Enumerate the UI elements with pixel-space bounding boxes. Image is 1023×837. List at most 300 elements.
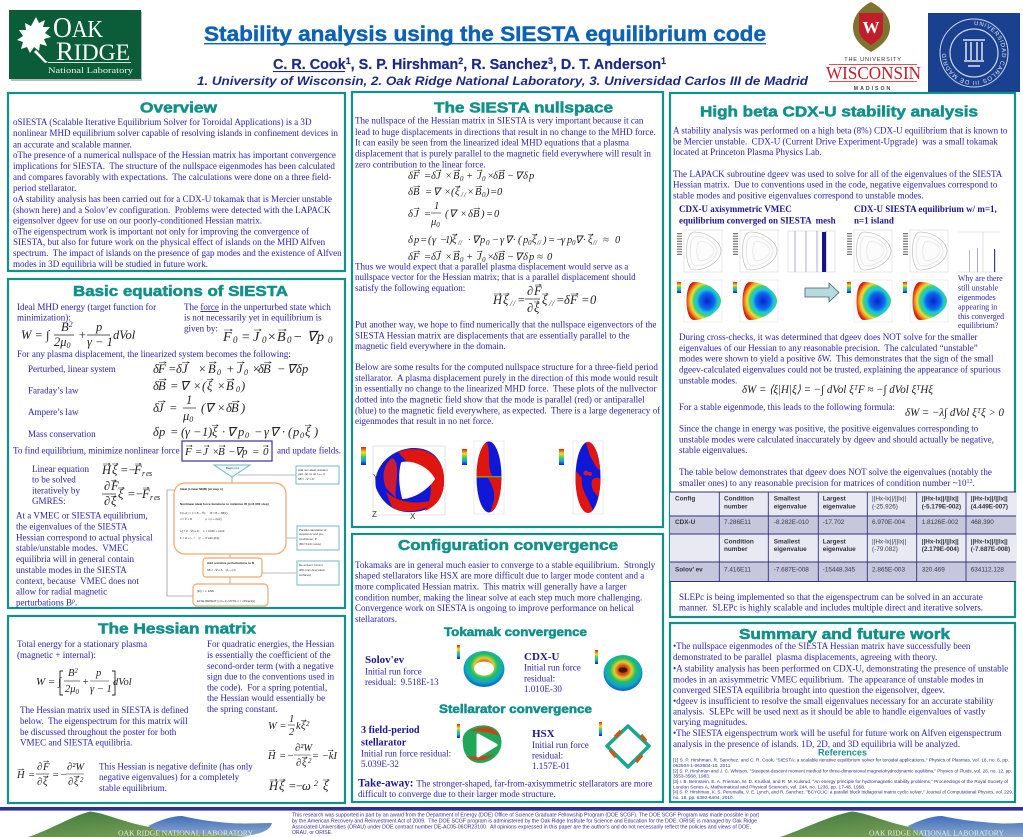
text: overview bullets: period stellarator.: [13, 183, 76, 193]
text: references: 062504-1-062504-10, 2011.: [673, 763, 732, 769]
equation: energy W: [21, 320, 136, 350]
equations: linear system: μ: [183, 409, 189, 423]
logo: University of Wisconsin: W: [862, 18, 880, 37]
equations: linear system: ×δB−∇δp: [252, 362, 308, 376]
table header row 2: ||Hx-lx||/||lx||: [872, 538, 907, 546]
text: positive energy: .: [973, 478, 975, 488]
authors: , S. P. Hirshman: [351, 57, 458, 73]
text: quadratic energies: the code). For a spring potential,: [207, 682, 327, 692]
text: nullspace intro: displacement that is purely parallel to the magnetic field everywhere will result in: [355, 148, 651, 158]
equation: energy W: γ − 1: [87, 335, 113, 349]
equations: spring potential: = −kI: [312, 751, 337, 762]
equations: linear system: ): [240, 379, 245, 393]
text: left subheading: equilibrium converged on SIESTA mesh: [679, 216, 836, 226]
table header row 1: ||Hx-lx||/||lx||: [922, 496, 959, 502]
plots: SIESTA heat maps: [847, 280, 948, 322]
text: references: [673, 758, 1013, 801]
text: summary bullets: demonstrated to be parallel plasma displacements, agreeing with theory.: [673, 652, 937, 662]
text: summary bullets: •A stability analysis has been performed on CDX-U, demonstrating the presence of unstable: [673, 664, 1008, 674]
equation: Hessian solve: Hξ=−F: [102, 463, 142, 477]
text: VMEC equilibrium note: Hessian correspond to actual physical: [16, 532, 153, 542]
equations: spring potential: 2: [289, 727, 295, 738]
panel: overview: [8, 93, 345, 271]
table header row 2: (-7.687E-008): [971, 546, 1010, 553]
text: right subheading: [854, 204, 997, 226]
text: CDX-U intro: located at Princeton Plasma Physics Lab.: [673, 147, 822, 157]
text: configuration intro: Convergence work on SIESTA is ongoing to improve performance on helical: [355, 603, 634, 613]
text: acknowledgement: ORAU, or ORISE.: [292, 830, 332, 836]
icon: HSX stellarator: [599, 722, 649, 767]
text: take-away: [358, 778, 652, 799]
plots: VMEC contours: [680, 230, 778, 272]
text: configuration intro: [355, 560, 656, 624]
equation: energy W: 0: [67, 341, 71, 350]
text: configuration intro: more complicated Hessian matrix. This matrix will generally have a larger: [355, 582, 626, 592]
logo: Oak Ridge National Laboratory: National Laboratory: [48, 65, 134, 75]
text: positive energy: unstable modes were calculated inaccurately by dgeev and should actually be negative,: [679, 434, 994, 444]
text: Solov'ev: [365, 654, 439, 687]
equation: force F0: 0: [328, 335, 333, 345]
text: quadratic energies: sign due to the conventions used in: [207, 672, 335, 682]
equations: nullspace derivation: ·∇p: [468, 235, 485, 246]
equation: total energy: 2: [74, 667, 78, 675]
text: VMEC equilibrium note: the eigenvalues of the SIESTA: [16, 522, 128, 532]
text: equation labels: Ampere’s law: [28, 407, 79, 417]
text: VMEC equilibrium note: .: [75, 598, 77, 608]
plot: cross-section 2: [559, 441, 603, 514]
flowchart: SIESTA algorithm: conditioner: Pʼ: [299, 537, 318, 541]
text: Hessian definition: below. The eigenspectrum for this matrix will: [20, 716, 188, 726]
equation: Hessian definition: ∂F: [37, 762, 50, 773]
equation: Hessian solve: ∂ξ: [104, 494, 117, 508]
equations: nullspace derivation: 0: [460, 175, 464, 183]
text: negative definite: This Hessian is negative definite (has only: [99, 762, 253, 772]
equation: Hessian solve: [101, 463, 160, 508]
table header row 2: eigenvalue: [774, 546, 807, 553]
panel: summary and future work: [670, 623, 1015, 802]
equations: nullspace derivation: ξ: [532, 235, 537, 246]
authors: C. R. Cook: [273, 57, 346, 73]
text: numerical expectation: magnetic field everywhere in the domain.: [355, 341, 506, 351]
text: CDX-U: 1.010E-30: [524, 684, 562, 694]
equations: linear system: 1: [186, 393, 192, 407]
equations: linear system: ξ): [305, 425, 318, 439]
text: energy and force intro: is not necessarily yet in equilibrium is: [184, 312, 322, 322]
text: GMRES: GMRES:: [32, 496, 66, 506]
text: nullspace results: (blue) to the magnetic field everywhere, as expected. There is a large degeneracy of: [355, 406, 661, 416]
equation: nullspace condition: ∂ξ: [527, 301, 540, 315]
note: spurious eigenmodes: this converged: [958, 312, 1004, 321]
text: quadratic energies: the spring constant.: [207, 704, 278, 714]
plots: SIESTA contours: [850, 230, 948, 272]
text: Hessian definition: VMEC and SIESTA equilibria.: [20, 738, 132, 748]
table header row 1: number: [724, 504, 748, 510]
authors: 3: [548, 56, 553, 66]
text: nullspace results: Below are some results for the computed nullspace structure for a three-field period: [355, 362, 658, 372]
text: summary bullets: •dgeev is insufficient to resolve the small eigenvalues necessary for an accurate stability: [673, 696, 994, 706]
table row: Solov'ev: 7.416E11: [724, 566, 751, 574]
text: HSX: Initial run force: [532, 740, 589, 750]
equations: nullspace derivation: −γ∇·(p: [492, 235, 528, 246]
text: nullspace vector: satisfy the following equation:: [355, 283, 465, 293]
flowchart: SIESTA algorithm: Add non-ideal resistant: [298, 468, 328, 472]
text: nullspace intro: lead to huge displacements in directions that result in no change to the MHD force.: [355, 127, 656, 137]
text: configuration intro: stellarators.: [355, 614, 397, 624]
table row: Solov'ev: 634112.128: [971, 566, 1004, 574]
heading: SIESTA nullspace: The SIESTA nullspace: [434, 100, 613, 116]
text: linearized system: For any plasma displacement, the linearized system becomes the following:: [17, 349, 291, 359]
panel: high beta CDX-U: [670, 93, 1016, 617]
text: overview bullets: eigensolver dgeev for use on our poorly-conditioned Hessian matrix.: [13, 216, 262, 226]
title: Stability analysis using the SIESTA equilibrium code: [204, 23, 766, 46]
text: VMEC equilibrium note: context, because VMEC does not: [16, 576, 139, 586]
text: CDX-U: CDX-U: [524, 651, 559, 663]
note: spurious eigenmodes: still unstable: [958, 284, 999, 292]
equation: Hessian definition: ∂ξ: [68, 777, 78, 788]
equation: total energy: p: [95, 668, 101, 679]
text: acknowledgement: by the American Recovery and Reinvestment Act of 2009. The DOE SCGF program is administered by the Oak Ridge Institute for Science and Education for the DOE. ORISE is managed by Oak Ridge: [292, 818, 757, 824]
equations: spring potential: Hξ=−ω: [269, 779, 311, 793]
text: VMEC equilibrium note: stable/unstable modes. VMEC: [16, 543, 128, 553]
equation: nullspace condition: Hξ: [493, 293, 508, 307]
logo: Oak Ridge National Laboratory: [9, 10, 142, 81]
text: overview bullets: SIESTA, but also for future work on the physical effect of islands on the MHD Alfven: [13, 237, 326, 247]
equation: Hessian solve: ∂F: [104, 479, 119, 493]
plot: SIESTA spectrum: [958, 232, 1000, 272]
equation: force F0: [222, 329, 333, 345]
table row: Solov'ev: [675, 566, 1004, 574]
equations: nullspace derivation: +J: [466, 252, 483, 263]
note: spurious eigenmodes: appearing in: [958, 302, 997, 312]
equation: Hessian solve: ξ=−F: [118, 487, 150, 501]
text: VMEC equilibrium note: [16, 510, 153, 608]
logo: Universidad Carlos III de Madrid: UNIVERSIDAD CARLOS III DE MADRID: [942, 20, 1006, 86]
text: 3 field-period stellarator: Initial run force residual:: [361, 748, 451, 758]
heading: summary: Summary and future work: [739, 626, 951, 643]
table row: CDX-U: 6.970E-004: [872, 519, 905, 526]
text: SLEPc: manner. SLEPc is highly scalable and includes multiple direct and iterative solvers.: [679, 602, 983, 612]
text: references: London Series A, Mathematical and Physical Sciences, vol. 244, no. 1236, pp. 17-48, 1958.: [673, 784, 865, 790]
equation: Hessian definition: ∂²W: [67, 762, 85, 773]
text: quadratic energies: For quadratic energies, the Hessian: [207, 639, 335, 649]
flowchart: SIESTA algorithm: part: (at n≥ n0 n++ =): [298, 472, 325, 476]
text: VMEC equilibrium note: equilibria will in general contain: [16, 554, 135, 564]
text: configuration intro: Tokamaks are in general much easier to converge to a stable equilibrium. Strongly: [355, 560, 656, 570]
table header row 1: (-25.926): [872, 504, 898, 510]
text: cross-checks: unstable modes.: [679, 376, 737, 386]
equation: force F0: ×B: [267, 330, 286, 345]
equations: linear system: 0: [189, 415, 193, 424]
equation: energy W: 2μ: [54, 335, 67, 349]
logo: Universidad Carlos III de Madrid: [928, 13, 1020, 92]
equations: nullspace derivation: 0: [460, 256, 464, 264]
text: overview bullets: [13, 117, 342, 269]
text: Hessian definition: [20, 705, 189, 748]
panel: Hessian matrix: [8, 616, 345, 803]
text: nullspace intro: The nullspace of the Hessian matrix in SIESTA is very important because it can: [355, 116, 644, 126]
table header row 2: (-79.082): [872, 546, 898, 553]
text: summary bullets: •The nullspace eigenmodes of the SIESTA Hessian matrix have successfully been: [673, 641, 971, 651]
equations: nullspace derivation: ×δB−∇δp: [487, 171, 534, 182]
text: positive energy: 12: [967, 479, 973, 485]
equation: Hessian solve: res: [150, 493, 160, 502]
equations: nullspace derivation: //: [460, 191, 467, 199]
arrow: VMEC to SIESTA: [805, 283, 839, 302]
heading: overview: Overview: [140, 100, 218, 116]
equation: total energy: B: [68, 668, 74, 679]
equations: spring potential: 2: [308, 757, 312, 765]
text: CDX-U intro: [673, 126, 1008, 200]
logo: Oak Ridge National Laboratory: RIDGE: [56, 37, 130, 66]
text: energy and force intro: The force in the unperturbed state which: [184, 302, 331, 312]
text: nullspace vector: [355, 262, 636, 293]
text: equation labels: Perturbed, linear system: [28, 364, 116, 374]
text: overview bullets: and compares favorably with expectations. The calculations were done on a three field-: [13, 172, 331, 182]
equations: linear system: δF=δJ×B: [153, 362, 216, 376]
equations: linear system: 0: [300, 431, 304, 440]
table header row 2: Largest: [823, 538, 847, 546]
flowchart: SIESTA algorithm: ||F|| < ε, END: [197, 589, 214, 593]
equations: nullspace derivation: 0: [482, 191, 486, 199]
text: positive energy: [679, 424, 994, 488]
affiliations: 1. University of Wisconsin, 2. Oak Ridge National Laboratory, 3. Universidad Carlos III de Madrid: [197, 74, 809, 88]
table header row 2: ||Hx-lx||/||lx||: [922, 538, 959, 546]
text: VMEC equilibrium note: At a VMEC or SIESTA equilibrium,: [16, 510, 148, 520]
text: nullspace results: [355, 362, 661, 426]
equations: nullspace derivation: +J: [466, 171, 483, 182]
text: energy and force intro: [17, 302, 331, 334]
panel: SIESTA nullspace: [352, 92, 663, 527]
equations: nullspace derivation: //: [592, 239, 598, 247]
equations: nullspace derivation: 0: [486, 239, 490, 247]
equations: nullspace derivation: δJ=: [408, 209, 431, 220]
text: total energy: (magnetic + internal):: [17, 650, 96, 660]
equations: nullspace derivation: [408, 170, 621, 264]
text: total energy: [17, 639, 147, 660]
equation: stable eigenmode: δW = −λ∫ dVol ξᵀξ > 0: [905, 406, 1004, 419]
heading: high beta CDX-U: High beta CDX-U stability analysis: [700, 104, 978, 120]
equations: nullspace derivation: (∇×δB)=0: [445, 209, 500, 220]
text: CDX-U intro: be Mercier unstable. CDX-U (Current Drive Experiment-Upgrade) was a small tokamak: [673, 136, 998, 146]
icon: oak leaf: [17, 17, 51, 63]
table: eigenvalue comparison: [670, 492, 1016, 582]
text: numerical expectation: [355, 320, 656, 351]
equation: Hessian definition: 2: [80, 776, 84, 784]
equation: nullspace condition: [492, 284, 597, 315]
panel: configuration convergence: [352, 534, 663, 802]
text: references: [1] S. P. Hirshman, R. Sanchez, and C. R. Cook, "SIESTA: a scalable iterative equilibrium solver for toroidal applications," Physics of Plasmas, vol. 18, no. 6, pp.: [673, 758, 1009, 764]
flowchart: SIESTA algorithm: Hessian H and pre-: [299, 532, 324, 536]
text: right subheading: CDX-U SIESTA equilibrium w/ m=1,: [854, 204, 997, 214]
text: nullspace results: stellarator. A plasma displacement purely in the direction of this mode would result: [355, 373, 658, 383]
equation: energy W: dVol: [113, 328, 136, 342]
equation: total energy: 0: [76, 688, 80, 696]
flowchart: SIESTA algorithm: F(n+1) = J × B − ∇p B = B + δB(ξ): [180, 511, 227, 515]
icon: Solov'ev torus: [457, 645, 504, 687]
text: quadratic energies: is essentially the coefficient of the: [207, 650, 331, 660]
text: Solov'ev: Solov'ev: [365, 654, 405, 666]
text: GMRES: Linear equation: [32, 464, 89, 474]
text: references: 3553-3568, 1983.: [673, 774, 710, 780]
text: numerical expectation: SIESTA Hessian matrix are displacements that are essentially parallel to the: [355, 330, 630, 340]
equations: linear system: 0: [217, 368, 221, 377]
flowchart: SIESTA algorithm: Add resistive perturbations to B: [207, 561, 255, 565]
table row: Solov'ev: 320.469: [922, 566, 945, 574]
equation: total energy: +: [82, 677, 89, 688]
flowchart: SIESTA algorithm: Lξ = F · ∇(n+1) L = δ²/δt² + νd/dt: [180, 529, 225, 533]
text: VMEC equilibrium note: unstable modes in the SIESTA: [16, 565, 127, 575]
equation: nullspace condition: //: [548, 299, 555, 308]
equation box: nonlinear force: [182, 441, 272, 461]
text: overview bullets: oThe presence of a numerical nullspace of the Hessian matrix has important convergence: [13, 150, 336, 160]
text: cross-checks: dgeev-calculated eigenvalues could not be trusted, explaining the appearance of spurious: [679, 364, 1001, 374]
equation: Hessian solve: res: [142, 469, 152, 478]
text: HSX: HSX: [532, 728, 555, 740]
equation: Hessian definition: ∂ξ: [37, 777, 48, 788]
equations: spring potential: ξ: [323, 779, 329, 793]
text: nullspace results: eigenmodes that result in no net force.: [355, 416, 493, 426]
text: quadratic energies: [207, 639, 335, 714]
text: equation labels: Faraday’s law: [28, 386, 79, 396]
text: negative definite: stable equilibrium.: [99, 783, 167, 793]
flowchart: SIESTA algorithm: Ideal (Linear MHD) (at step n): [180, 487, 223, 491]
text: cross-checks: modes were shown to yield a positive δW. This demonstrates that the sign of the small: [679, 354, 994, 364]
table header row 2: Smallest: [774, 538, 801, 546]
text: summary bullets: varying magnitudes.: [673, 717, 747, 727]
text: nullspace intro: It can easily be seen from the linearized ideal MHD equations that a plasma: [355, 138, 629, 148]
equation: Hessian definition: =−: [52, 770, 67, 781]
equation: nullspace condition: ξ: [542, 293, 547, 307]
text: CDX-U intro: A stability analysis was performed on a high beta (8%) CDX-U equilibrium that is known to: [673, 126, 1008, 136]
text: summary bullets: [673, 641, 1008, 749]
text: overview bullets: implications for SIESTA. The structure of the nullspace eigenmodes has been calculated: [13, 161, 335, 171]
text: acknowledgement: [292, 812, 760, 836]
text: CDX-U: Initial run force: [524, 662, 581, 672]
logo: University of Wisconsin: [826, 2, 921, 92]
text: HSX: [532, 728, 589, 771]
equation: delta W: δW = ⟨ξ|H|ξ⟩ = −∫ dVol ξᵀF ≈ −∫ dVol ξᵀHξ: [742, 383, 933, 396]
text: SLEPc: SLEPc is being implemented so that the eigenspectrum can be solved in an accurate: [679, 592, 983, 602]
text: references: [3] I. B. Bernstein, E. A. Frieman, M. D. Kruskal, and R. M. Kulsrud, "An energy principle for hydromagnetic stability problems," Proceedings of the Royal Society of: [673, 779, 1009, 785]
text: GMRES: to be solved: [32, 474, 76, 484]
equation: energy W: B: [61, 320, 69, 334]
text: take-away: Take-away: The stronger-shaped, far-from-axisymmetric stellarators are more: [358, 778, 652, 790]
text: nullspace intro: zero contribution to the linear force.: [355, 160, 486, 170]
table header row 2: ||Hx-lx||/||lx||: [971, 538, 1008, 546]
equations: linear system: δp=(γ−1)ξ·∇p: [153, 425, 244, 439]
text: Hessian definition: The Hessian matrix used in SIESTA is defined: [20, 705, 189, 715]
table row: CDX-U: [675, 519, 994, 526]
heading: Hessian matrix: The Hessian matrix: [98, 620, 257, 638]
text: overview bullets: nonlinear MHD equilibrium solver capable of resolving islands in confinement devices in: [13, 128, 338, 138]
text: CDX-U: [524, 651, 581, 694]
logo: University of Wisconsin: WISCONSIN: [826, 63, 921, 83]
plot: 3D stellarator mode structure: Z: [372, 510, 377, 519]
text: 3 field-period stellarator: 3 field-period: [361, 725, 420, 736]
text: overview bullets: an accurate and scalable manner.: [13, 140, 132, 150]
footer bar: [0, 807, 1023, 811]
text: numerical expectation: Put another way, we hope to find numerically that the nullspace eigenvectors of the: [355, 320, 656, 330]
text: acknowledgement: Associated Universities (ORAU) under DOE contract number DE-AC05-06OR23100. All opinions expressed in this paper are the author's and do not necessarily reflect the policies and views of DOE,: [292, 824, 751, 830]
equation: force F0: −∇p: [293, 330, 324, 345]
equations: linear system: δJ=: [153, 401, 177, 415]
text: Solov'ev: residual: 9.518E-13: [365, 677, 439, 687]
table row: CDX-U: CDX-U: [675, 519, 696, 526]
equations: spring potential: ∂ξ: [296, 758, 306, 769]
text: minimize force: To find equilibrium, minimize nonlinear force: [13, 446, 180, 456]
text: cross-checks: During cross-checks, it was determined that dgeev does NOT solve for the smaller: [679, 332, 978, 342]
equations: nullspace derivation: ×B: [467, 187, 482, 198]
text: nullspace intro: [355, 116, 656, 170]
text: CDX-U intro: stable modes and positive eigenvalues correspond to unstable modes.: [673, 190, 924, 200]
text: overview bullets: oSIESTA (Scalable Iterative Equilibrium Solver for Toroidal Applications) is a 3D: [13, 117, 312, 127]
equation: force F0: 0: [287, 335, 292, 345]
table header row 1: ||Hx-lx||/||lx||: [872, 496, 907, 502]
text: VMEC equilibrium note: ρ: [72, 598, 75, 604]
equation: total energy: [36, 667, 132, 696]
text: summary bullets: modes in an axisymmetric VMEC equilibrium. The appearance of unstable modes in: [673, 674, 984, 684]
text: positive energy: smaller ones) to any reasonable precision for matrices of condition number ~10: [679, 478, 967, 488]
text: acknowledgement: This research was supported in part by an award from the Department of Energy (DOE) Office of Science Graduate Fellowship Program (DOE SCGF). The DOE SCGF Program was made possible in part: [292, 812, 760, 818]
text: references: [2] S. P. Hirshman and J. C. Whitson, "Steepest-descent moment method for three-dimensional magnetohydrodynamic equilibria," Physics of Fluids, vol. 26, no. 12, pp.: [673, 768, 1012, 774]
table row: Solov'ev: 2.865E-003: [872, 566, 905, 574]
equations: nullspace derivation: δp=(γ−1)ξ: [408, 235, 456, 246]
text: configuration intro: condition number, making the linear solve at each step much more challenging.: [355, 592, 642, 602]
equations: nullspace derivation: //: [457, 239, 463, 247]
text: overview bullets: oA stability analysis has been carried out for a CDX-U tokamak that is Mercier unstable: [13, 194, 332, 204]
icon: 3 field-period stellarator: [457, 724, 501, 763]
equation: nullspace condition: =: [517, 293, 525, 307]
logo: University of Wisconsin: THE UNIVERSITY: [844, 57, 902, 63]
equation: energy W: 2: [69, 320, 73, 329]
table header row 2: [724, 538, 1010, 553]
text: cross-checks: [679, 332, 1001, 386]
plots: VMEC heat maps: [677, 280, 778, 322]
note: spurious eigenmodes: Why are there: [958, 274, 1003, 283]
text: nullspace vector: nullspace vector for the Hessian matrix; that is a parallel displacement should: [355, 272, 636, 282]
banner: left mountains: [28, 812, 272, 837]
equations: linear system: 0: [244, 368, 248, 377]
table header row 1: Condition: [724, 496, 754, 502]
text: take-away: difficult to converge due to their larger mode structure.: [358, 789, 556, 799]
text: nullspace vector: Thus we would expect that a parallel plasma displacement would serve as a: [355, 262, 628, 272]
equations: nullspace derivation: 0: [528, 239, 532, 247]
table header row 1: Largest: [823, 496, 847, 502]
table header row 1: (4.449E-007): [971, 504, 1008, 510]
equation: total energy: 2μ: [65, 684, 76, 695]
equations: spring potential: H=−: [267, 751, 294, 762]
heading: tokamak convergence: Tokamak convergence: [444, 625, 587, 639]
equations: spring potential: 2: [306, 720, 310, 728]
table header row 1: Config: [675, 496, 695, 502]
text: CDX-U intro: The LAPACK subroutine dgeev was used to solve for all of the eigenvalues of the SIESTA: [673, 169, 1003, 179]
text: negative definite: [99, 762, 253, 793]
equations: linear system: [153, 362, 318, 440]
text: total energy: Total energy for a stationary plasma: [17, 639, 147, 649]
equations: nullspace derivation: 0: [572, 239, 576, 247]
equation: Hessian definition: [16, 761, 85, 788]
text: CDX-U: residual:: [524, 674, 555, 684]
authors: 2: [458, 56, 463, 66]
equation: energy W: W = ∫: [21, 328, 50, 343]
equation: energy W: p: [95, 320, 102, 334]
table row: Solov'ev: -7.687E-008: [774, 566, 809, 574]
equations: nullspace derivation: δB=∇×(ξ: [408, 187, 460, 198]
banner: right mountains: [780, 812, 1023, 837]
equations: spring potential: 1: [289, 714, 294, 725]
text: summary bullets: •The SIESTA eigenspectrum work will be useful for future work on Alfven eigenspectrum: [673, 728, 1002, 738]
equation: total energy: dVol: [113, 677, 132, 688]
